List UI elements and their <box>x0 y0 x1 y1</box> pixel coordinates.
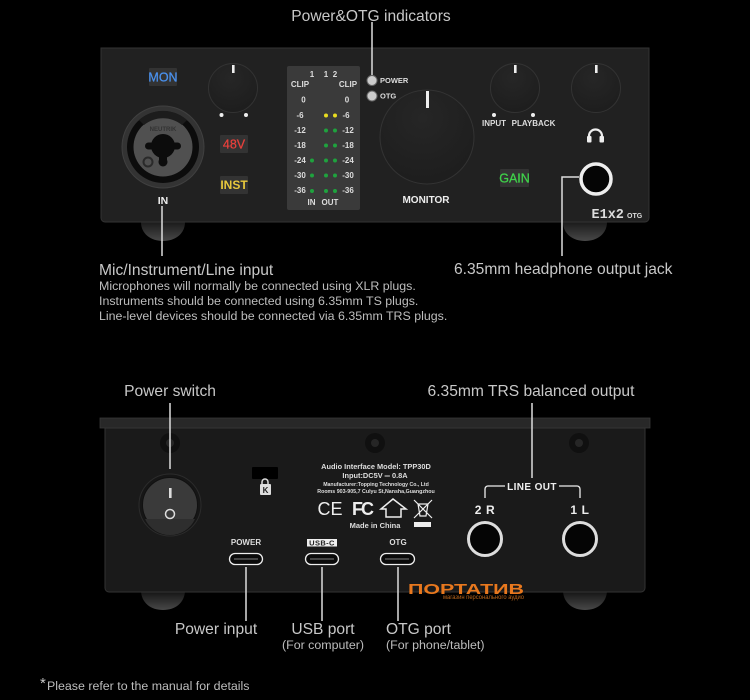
connector: headphone jack <box>581 164 611 194</box>
level meter panel: 0 <box>301 96 306 104</box>
port: OTG: OTG <box>389 538 407 547</box>
label: IN: IN <box>158 195 168 207</box>
knob: input gain <box>208 64 258 117</box>
port: POWER <box>230 538 262 564</box>
device info label: Made in China <box>350 521 401 530</box>
output 2 R <box>468 503 502 556</box>
port: USB-C: USB-C <box>309 538 335 548</box>
level meter panel: 0 <box>345 96 350 104</box>
label: MONITOR: MONITOR <box>402 195 450 206</box>
icon: headphones <box>587 130 604 142</box>
level meter panel: -30 <box>294 171 306 180</box>
level meter panel: -24 <box>294 156 306 165</box>
level meter panel: 1 <box>310 70 315 79</box>
output 1 L <box>564 503 596 556</box>
label: TRS balanced output: 6.35mm TRS balanced output <box>428 383 635 400</box>
level meter panel: -36 <box>294 186 306 195</box>
back body <box>105 428 645 592</box>
text: mic/instrument/line input: Instruments should be connected using 6.35mm TS plugs. <box>99 294 418 308</box>
level meter panel: -18 <box>342 141 354 150</box>
security slot and lock icon: K <box>263 486 269 495</box>
output 1 L: 1 L <box>570 503 590 517</box>
device info label: Rooms 903-905,7 Culyu St,Nansha,Guangzhou <box>317 489 435 495</box>
button: 48V <box>220 135 248 153</box>
port: POWER: POWER <box>231 538 261 547</box>
indicators: POWER and OTG LEDs: OTG <box>380 92 396 100</box>
label: OTG port: OTG port <box>386 621 452 638</box>
level meter panel: -12 <box>294 126 306 135</box>
level meter panel: -6 <box>296 111 304 120</box>
arrows: back callout lines <box>170 403 532 621</box>
watermark <box>408 581 524 601</box>
level meter panel: -24 <box>342 156 354 165</box>
knob: headphone volume <box>572 64 620 112</box>
label: power switch: Power switch <box>124 383 216 400</box>
level meter panel: -6 <box>342 111 350 120</box>
label: USB port: USB port <box>291 621 355 638</box>
knob: input/playback mix: PLAYBACK <box>512 119 556 128</box>
label: power input: Power input <box>175 621 258 638</box>
line out bracket <box>485 482 580 498</box>
device info label <box>317 462 435 530</box>
feet: front <box>141 218 607 241</box>
label: Power and OTG indicators: Power&OTG indicators <box>291 8 451 25</box>
output 2 R: 2 R <box>475 503 495 517</box>
label: USB port <box>282 621 364 652</box>
level meter panel: 1 <box>324 70 329 79</box>
text: mic/instrument/line input: Line-level devices should be connected via 6.35mm TRS plugs. <box>99 309 447 323</box>
level meter panel: 2 <box>333 70 338 79</box>
device info label: Audio Interface Model: TPP30D <box>321 462 431 471</box>
knob: input/playback mix <box>482 64 556 128</box>
level meter panel: -12 <box>342 126 354 135</box>
model name: OTG <box>627 213 643 220</box>
label: OTG port: (For phone/tablet) <box>386 638 484 652</box>
screws <box>160 433 589 453</box>
knob: monitor <box>380 90 474 184</box>
certification logos <box>317 499 432 527</box>
text: mic/instrument/line input: Mic/Instrument/Line input <box>99 262 274 279</box>
watermark: ПОРТАТИВ <box>408 581 524 598</box>
indicators: POWER and OTG LEDs <box>367 76 409 101</box>
label: USB port: (For computer) <box>282 638 364 652</box>
line out bracket: LINE OUT <box>507 482 557 493</box>
power rocker switch <box>139 474 201 536</box>
arrows: front callout lines <box>162 22 579 256</box>
device info label: Input:DC5V ═ 0.8A <box>342 471 408 480</box>
label: headphone output jack: 6.35mm headphone output jack <box>454 261 673 278</box>
button: GAIN: GAIN <box>499 172 530 186</box>
certification logos: CE <box>317 499 343 519</box>
port: USB-C <box>306 538 338 564</box>
feet: back <box>141 590 607 610</box>
knob: input/playback mix: INPUT <box>482 119 506 128</box>
connector: XLR combo input: NEUTRIK <box>150 127 177 133</box>
connector: XLR combo input <box>122 106 204 188</box>
model name: E1x2 <box>592 208 624 223</box>
security slot and lock icon <box>252 467 278 495</box>
watermark: магазин персонального аудио <box>443 594 524 601</box>
port: OTG <box>380 538 414 564</box>
back lid <box>100 418 650 428</box>
level meter panel: OUT <box>322 198 339 207</box>
text: mic/instrument/line input <box>99 262 447 323</box>
level meter panel: -30 <box>342 171 354 180</box>
level meter panel: CLIP <box>291 80 310 89</box>
footnote: Please refer to the manual for details <box>47 679 250 693</box>
certification logos: FC <box>352 499 374 519</box>
front faceplate <box>101 48 649 222</box>
level meter panel: -18 <box>294 141 306 150</box>
model name <box>592 208 643 223</box>
level meter panel: IN <box>308 198 316 207</box>
level meter panel <box>287 66 360 210</box>
button: MON: MON <box>148 70 178 84</box>
label: OTG port <box>386 621 484 652</box>
button: INST: INST <box>220 178 248 192</box>
panel: back of device <box>100 418 650 610</box>
panel: front of device <box>101 48 649 241</box>
text: mic/instrument/line input: Microphones will normally be connected using XLR plugs. <box>99 279 416 293</box>
device info label: Manufacturer:Topping Technology Co., Ltd <box>323 482 429 488</box>
level meter panel: CLIP <box>339 80 358 89</box>
level meter panel: -36 <box>342 186 354 195</box>
button: 48V: 48V <box>223 138 246 152</box>
footnote: * <box>40 675 46 692</box>
indicators: POWER and OTG LEDs: POWER <box>380 76 409 85</box>
